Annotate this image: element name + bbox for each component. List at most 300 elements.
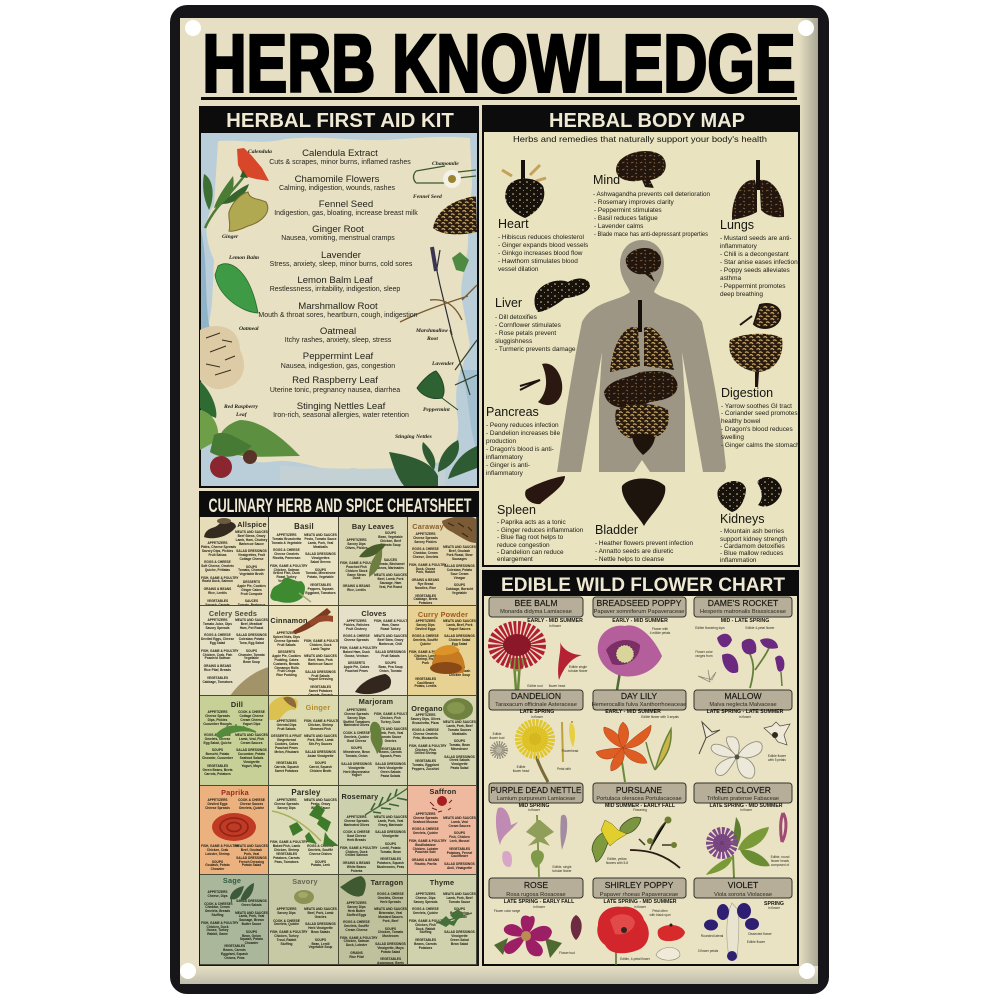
caraway text 2: Coleslaw, Potato <box>447 568 472 572</box>
bay text: Game Stews <box>347 573 366 577</box>
first aid plant labels: Lavender <box>431 361 455 367</box>
icon: marjoram sprig <box>370 722 383 754</box>
parsley text: Chicken, Shrimp <box>274 848 299 852</box>
saffron text 2: Lamb, Veal <box>451 820 468 824</box>
rosemary text 2: Mushrooms, Peas <box>377 865 404 869</box>
caraway text: Duck, Goose <box>416 567 435 571</box>
body map frame <box>483 106 799 566</box>
rosemary text: Herb Breads <box>347 838 366 842</box>
first aid plant labels: Chamomile <box>432 161 459 167</box>
first aid heading: HERBAL FIRST AID KIT <box>226 110 454 132</box>
allspice text: Savory Dips, Pickles <box>202 549 233 553</box>
liver text: Liver <box>495 296 522 310</box>
tarragon text <box>340 902 373 960</box>
flower: dame's rocket <box>694 597 792 688</box>
saffron text 2: Potatoes, Fennel <box>447 851 472 855</box>
celery text 2: Bean Soup <box>243 660 260 664</box>
first aid plant labels <box>222 149 459 440</box>
sage text: Chicken, Duck <box>207 925 228 929</box>
lungs text: - Star anise eases infection <box>720 259 798 266</box>
pancreas text: - Dandelion increases bile <box>486 430 560 437</box>
allspice text 2: Beef Stews, Gravy <box>238 534 265 538</box>
bladder text: - Heather flowers prevent infection <box>595 540 693 547</box>
spleen text: - Dandelion can reduce <box>497 549 564 556</box>
digestion text: - Yarrow soothes GI tract <box>721 403 792 410</box>
dill text: Carrots, Potatoes <box>204 772 231 776</box>
cinnamon text 2: Fruit Salads <box>311 674 330 678</box>
icon: curry powder bowls <box>430 645 465 674</box>
icon: savory pile <box>269 875 339 965</box>
flower: dandelion: LATE SPRING <box>520 709 554 715</box>
flower: violet: Edible flower <box>747 940 766 944</box>
culinary cell: ginger: Ginger <box>306 703 330 712</box>
fennel seed pile <box>433 196 477 234</box>
culinary cell: oregano: Oregano <box>411 704 443 713</box>
mind text: - Basil reduces fatigue <box>594 215 658 222</box>
culinary cell: dill <box>200 696 269 786</box>
cloves text: EGGS & CHEESE <box>343 634 370 638</box>
curry text 2: Chicken Soup <box>449 673 470 677</box>
marjoram text 2: Beans, Carrots <box>379 750 402 754</box>
first aid plant labels: Leaf <box>235 412 248 418</box>
cloves text <box>340 619 378 673</box>
marjoram text 2: Turkey, Duck <box>381 720 400 724</box>
curry text: Savory Dips <box>416 623 435 627</box>
cinnamon text 2: Yogurt Dressing <box>308 677 333 681</box>
paprika text 2: Beef, Goulash <box>241 848 262 852</box>
marjoram text: Marinated Olives <box>344 723 369 727</box>
allspice text 2: Apple Pie, Cookies <box>237 584 266 588</box>
first aid text list: Stress, anxiety, sleep, minor burns, cold sores <box>270 261 413 268</box>
flower: purslane: MID SUMMER - EARLY FALL <box>605 803 676 809</box>
kidneys text: - Cardamom detoxifies <box>720 543 785 550</box>
cloves text 2: Ham, Game <box>382 623 399 627</box>
panel: edible wild flower chart <box>483 570 798 965</box>
saffron text: Risotto, Paella <box>415 862 436 866</box>
flower: mallow: Malva neglecta Malvaceae <box>709 702 777 708</box>
cinnamon text: Cinnamon Rolls <box>274 666 299 670</box>
heart text: Heart <box>498 217 529 231</box>
tarragon text: Chicken, Salmon <box>344 939 369 943</box>
tarragon text 2: MEATS AND SAUCES <box>374 907 407 911</box>
first aid plant labels: Peppermint <box>423 407 450 413</box>
allspice text 2: SALAD DRESSINGS <box>236 549 267 553</box>
celery text: Poached Salmon <box>205 656 230 660</box>
lungs text: deep breathing <box>720 291 763 298</box>
parsley text: VEGETABLES <box>276 852 297 856</box>
culinary cell: oregano <box>408 696 477 786</box>
tarragon text: Duck, Lobster <box>346 943 367 947</box>
paprika text: Lobster, Shrimp <box>205 852 230 856</box>
caraway text 2: Vinegar <box>454 576 465 580</box>
saffron text 2: VEGETABLES <box>449 847 470 851</box>
flower: purslane: Portulaca oleracea Portulacaceae <box>596 796 682 802</box>
marjoram text 2: VEGETABLES <box>380 747 401 751</box>
saffron text 2: Cauliflower <box>451 854 468 858</box>
oregano text 2 <box>443 720 476 770</box>
allspice text: Soft Cheese, Omelets <box>201 564 234 568</box>
curry text 2: SALAD DRESSINGS <box>444 634 475 638</box>
saffron text: FISH, GAME & POULTRY <box>409 839 447 843</box>
watercolor background <box>201 133 477 486</box>
flower: dandelion: Edible <box>517 765 526 769</box>
rosemary text 2: Potatoes, Squash <box>377 861 404 865</box>
allspice text: Roast Duck, Salmon <box>202 579 233 583</box>
bay text: Chicken Stock <box>346 569 367 573</box>
flower: red clover: Trifolium pratense Fabaceae <box>707 796 779 802</box>
celery text: Egg Salad <box>210 641 225 645</box>
lungs text: inflammatory <box>720 243 758 250</box>
body map subtitle: Herbs and remedies that naturally support your body's health <box>513 134 767 144</box>
celery text 2: Coleslaw, Potato <box>239 637 264 641</box>
flower: breadseed poppy: Flower with <box>652 627 668 631</box>
sage text 2 <box>235 900 268 946</box>
culinary cell: thyme: Thyme <box>430 878 454 887</box>
digestion text <box>721 386 800 449</box>
basil text 2: Peppers, Squash <box>308 587 333 591</box>
first aid text list: Stinging Nettles Leaf <box>297 401 386 412</box>
flower: shirley poppy: LATE SPRING - MID SUMMER <box>603 899 677 905</box>
rosemary text 2: SALAD DRESSINGS <box>375 830 406 834</box>
flower: day lily: EARLY - MID SUMMER <box>605 709 661 715</box>
basil text 2: Tomato, Minestrone <box>305 571 336 575</box>
savory text 2 <box>304 908 337 950</box>
curry text: FISH, GAME & POULTRY <box>409 650 447 654</box>
oregano text: FISH, GAME & POULTRY <box>409 744 447 748</box>
pancreas text: inflammatory <box>486 470 524 477</box>
celery text 2: Tuna, Egg Salad <box>239 641 264 645</box>
caraway text 2: SALAD DRESSINGS <box>444 564 475 568</box>
thyme text 2: Tomato Sauce <box>449 900 470 904</box>
tarragon text: GRAINS <box>350 951 363 955</box>
sage text 2: Chowder <box>245 941 258 945</box>
parsley text: Peas, Tomatoes <box>274 860 299 864</box>
ginger root <box>229 192 268 231</box>
flower: breadseed poppy <box>593 597 686 690</box>
caraway text <box>409 532 447 605</box>
cinnamon text 2: Lamb Tagine <box>311 647 330 651</box>
flower: dame's rocket: Edible flowering tops <box>695 626 725 630</box>
chamomile sprig <box>414 166 476 188</box>
celery text 2: MEATS AND SAUCES <box>235 618 268 622</box>
flower: shirley poppy: with black spot <box>650 913 671 917</box>
flower: purple dead nettle: PURPLE DEAD NETTLE <box>490 785 582 795</box>
kidneys text: - Blue mallow reduces <box>720 550 783 557</box>
cinnamon text: Cheese Spreads <box>274 639 299 643</box>
caraway text 2: Vegetable <box>452 591 467 595</box>
cinnamon text: Apple Pie, Cookies <box>272 654 301 658</box>
cinnamon text: Spiced Nuts, Dips <box>273 635 300 639</box>
curry text: VEGETABLES <box>415 677 436 681</box>
allspice text: Quiche, Frittatas <box>205 568 230 572</box>
dill text: SOUPS <box>212 748 223 752</box>
first aid plant labels: Calendula <box>248 149 272 155</box>
flower: bee balm: tubular flower <box>568 669 589 673</box>
icon: basil leaves <box>270 578 312 603</box>
sage text 2: Bean, Onion <box>242 934 261 938</box>
dill text: VEGETABLES <box>207 764 228 768</box>
allspice text 2: Vinaigrettes, Fruit <box>238 553 265 557</box>
flower: red clover: composed of <box>771 863 789 867</box>
marjoram text: Vinaigrette <box>348 766 365 770</box>
oregano text 2: Minestrone <box>451 747 468 751</box>
sage text: COOK & CHEESE <box>204 902 231 906</box>
bay text: Rice, Lentils <box>347 588 366 592</box>
body map heading: HERBAL BODY MAP <box>549 110 745 132</box>
paprika text 2: French Dressing <box>239 860 264 864</box>
ginger text 2: Stir-Fry Sauces <box>309 742 332 746</box>
rosemary text <box>340 816 373 874</box>
icon: liver <box>534 279 590 312</box>
flower: mallow: in flower <box>739 715 752 719</box>
icon: sage leaves <box>200 875 269 965</box>
flower: rose: Rosa rugosa Rosaceae <box>506 892 566 898</box>
rosemary text 2: VEGETABLES <box>380 857 401 861</box>
mind text: - Rosemary improves clarity <box>594 199 675 206</box>
flower: dandelion: Flowerhead <box>562 749 579 753</box>
culinary cell: marjoram <box>339 696 408 786</box>
thyme text 2: Lamb, Pork, Beef <box>446 896 473 900</box>
first aid text list: Calming, indigestion, wounds, rashes <box>279 185 395 192</box>
allspice text 2: SAUCES <box>245 599 258 603</box>
first aid plant labels: Red Raspberry <box>223 404 259 410</box>
sage text: Omelets, Breads <box>205 909 230 913</box>
marjoram text 2: Tomato Sauce <box>380 735 401 739</box>
tarragon text: APPETIZERS <box>346 901 366 905</box>
savory text 2: Beef, Pork, Lamb <box>307 911 334 915</box>
liver text: - Dill detoxifies <box>495 314 537 321</box>
bay text: Duck <box>353 576 360 580</box>
allspice text 2: SOUPS <box>246 565 257 569</box>
rosemary text: APPETIZERS <box>346 815 366 819</box>
culinary cell: savory: Savory <box>292 877 318 886</box>
rosemary text: White Beans <box>347 865 366 869</box>
flower: purple dead nettle: MID SPRING <box>519 803 549 809</box>
marjoram text: Herb Mayonnaise <box>343 770 370 774</box>
oregano text: Feta, Mozzarella <box>413 736 438 740</box>
sage text: APPETIZERS <box>207 890 228 894</box>
savory text: Omelets, Quiche <box>274 922 299 926</box>
flower: dandelion <box>489 690 583 782</box>
marjoram text: SOUPS <box>351 746 362 750</box>
marjoram text: Cheese Spreads <box>344 712 369 716</box>
pancreas text: Pancreas <box>486 405 539 419</box>
bay text 2 <box>374 531 407 589</box>
tarragon text 2: Vinaigrette, Mayo <box>377 946 404 950</box>
cloves text 2: Fruit Salads <box>381 654 400 658</box>
flower: shirley poppy: Petal often <box>652 909 668 913</box>
first aid text list: Nausea, indigestion, gas, congestion <box>281 363 395 370</box>
icon: paprika spiral <box>212 813 256 841</box>
flower: dame's rocket: Flower color <box>695 650 714 654</box>
heart text: - Hibiscus reduces cholesterol <box>498 234 584 241</box>
dill text 2: MEATS AND SAUCES <box>235 733 268 737</box>
basil text 2: Pesto, Tomato Sauce <box>304 537 336 541</box>
basil text: APPETIZERS <box>276 533 296 537</box>
parsley text <box>270 798 308 864</box>
curry text: APPETIZERS <box>415 619 436 623</box>
mind text: - Blade mace has anti-depressant properties <box>594 231 708 238</box>
flower: bee balm: Edible root <box>527 684 543 688</box>
parsley text: FISH, GAME & POULTRY <box>270 840 308 844</box>
basil text 2: VEGETABLES <box>310 583 331 587</box>
dill text 2 <box>235 710 268 768</box>
caraway text: Pork, Rabbit <box>416 570 435 574</box>
culinary cell: tarragon <box>339 875 408 965</box>
ginger text 2: Chicken Broth <box>310 769 331 773</box>
cloves text: Poached Pears <box>345 669 368 673</box>
bladder text: - Annatto seeds are diuretic <box>595 548 674 555</box>
tarragon text 2: VEGETABLES <box>380 957 401 961</box>
culinary cell: saffron: Saffron <box>430 787 456 796</box>
rosemary text: Marinated Olives <box>344 823 369 827</box>
icon: spleen <box>525 476 565 504</box>
rosemary text 2: Lentil, Potato <box>380 846 401 850</box>
marjoram text 2: Herb Vinaigrette <box>378 766 403 770</box>
celery text <box>201 618 239 684</box>
parsley text: Savory Dips <box>277 806 296 810</box>
flower: purple dead nettle: Lamium purpureum Lamiaceae <box>497 796 575 802</box>
sage vegetables text: VEGETABLES <box>224 944 245 948</box>
icon: cloves pile <box>355 674 392 694</box>
flower: dame's rocket: MID - LATE SPRING <box>721 618 769 624</box>
flower: purple dead nettle: in flower <box>528 808 541 812</box>
caraway text: Cabbage, Beets <box>414 597 437 601</box>
cinnamon text: Fruit Salads <box>277 643 296 647</box>
culinary cell: paprika: Paprika <box>221 788 249 797</box>
oregano text: Bruschetta, Pizza <box>412 721 439 725</box>
peppermint leaf <box>417 371 458 410</box>
basil text 2: SALAD DRESSINGS <box>305 552 336 556</box>
parsley text 2: Omelets, Soufflé <box>308 848 333 852</box>
lungs text: - Poppy seeds alleviates <box>720 267 790 274</box>
parsley text: Cheese Spreads <box>274 802 299 806</box>
cinnamon text: Custards, Breads <box>273 662 300 666</box>
sage text: Goose, Turkey <box>207 928 228 932</box>
flower: red clover <box>694 783 792 878</box>
flower: purple dead nettle <box>489 783 583 877</box>
marjoram text: Omelets, Quiche <box>344 735 369 739</box>
marjoram text: Yogurt <box>351 773 362 777</box>
flower: red clover: Edible, round <box>771 855 790 859</box>
mounting holes <box>180 20 815 979</box>
thyme text: VEGETABLES <box>415 938 436 942</box>
flower: mallow <box>694 690 792 778</box>
first aid text list <box>258 148 418 419</box>
flower: violet: VIOLET <box>728 880 759 890</box>
first aid text list: Mouth & throat sores, heartburn, cough, indigestion <box>258 312 418 319</box>
bay text 2: SOUPS <box>385 531 396 535</box>
ginger text: Fruit Salads <box>277 727 296 731</box>
basil text <box>270 533 308 583</box>
bay text: Olives, Pickles <box>345 546 368 550</box>
bladder text: - Nettle helps to cleanse <box>595 556 664 563</box>
liver text: - Turmeric prevents damage <box>495 346 576 353</box>
tarragon text 2: Chicken, Tomato <box>378 930 403 934</box>
parsley text 2: EGGS & CHEESE <box>307 844 334 848</box>
parsley text 2: Cheese Dishes <box>309 852 332 856</box>
savory text <box>270 908 303 946</box>
marjoram text: Savory Dips <box>347 716 366 720</box>
allspice text: EGGS & CHEESE <box>204 560 231 564</box>
mind text: - Lavender calms <box>594 223 643 230</box>
dill text 2: Yogurt Dips <box>243 722 260 726</box>
basil text 2: Lamb, Pork, Veal <box>308 541 333 545</box>
parsley text 2 <box>304 799 337 868</box>
allspice text 2: Ginger Cakes <box>241 588 262 592</box>
caraway text: Savory Pickles <box>414 540 437 544</box>
flower: breadseed poppy: Papaver somniferum Papaveraceae <box>594 609 684 615</box>
culinary cell: marjoram: Marjoram <box>359 697 393 706</box>
culinary cell: thyme <box>408 875 477 965</box>
first aid text list: Restlessness, irritability, indigestion, sleep <box>270 286 400 293</box>
bay text 2: Tomato Soup <box>380 543 401 547</box>
culinary cell: tarragon: Tarragon <box>371 878 403 887</box>
pancreas text: - Dragon's blood is anti- <box>486 446 554 453</box>
flower: violet: Viola sororia Violaceae <box>714 892 772 898</box>
icon: tarragon bunch <box>339 875 408 965</box>
allspice text: Pâtés, Cheese Spreads <box>201 545 236 549</box>
dill text 2: Seafood Salads <box>240 756 263 760</box>
ginger text: Gingerbread <box>277 738 296 742</box>
caraway text 2 <box>443 545 476 595</box>
flower: dandelion: flower bud <box>490 736 505 740</box>
paprika text: Chicken, Crab <box>207 848 228 852</box>
basil text: Vegetables <box>278 579 295 583</box>
ginger text 2: Steamed Fish <box>310 727 331 731</box>
pancreas text: inflammatory <box>486 454 524 461</box>
thyme text: Duck, Rabbit <box>416 927 435 931</box>
lavender and roots <box>400 247 477 395</box>
cloves text 2: Barbecue, Chili <box>379 642 402 646</box>
saffron text: EGGS & CHEESE <box>412 827 439 831</box>
flower: shirley poppy: in flower <box>634 905 647 909</box>
dill text: Chowder, Cucumber <box>202 756 233 760</box>
savory text: Stuffing <box>280 942 293 946</box>
flower: mallow: Edible flower <box>768 754 787 758</box>
oregano text 2: Greek Salads <box>449 758 470 762</box>
cloves text: Cheese Spreads <box>344 638 369 642</box>
culinary cell: cinnamon <box>269 606 339 696</box>
sage text 2: Sausage, Brown <box>239 918 264 922</box>
saffron text: APPETIZERS <box>415 812 436 816</box>
culinary cell: rosemary: Rosemary <box>342 792 378 801</box>
cloves text: APPETIZERS <box>346 619 366 623</box>
curry text: Chicken, Lamb <box>414 654 437 658</box>
lemon balm leaf <box>215 264 258 313</box>
flower chart heading: EDIBLE WILD FLOWER CHART <box>501 574 785 596</box>
marjoram text: SALAD DRESSINGS <box>341 762 372 766</box>
caraway text: VEGETABLES <box>415 594 436 598</box>
first aid text list: Lavender <box>321 250 362 261</box>
culinary cell: ginger <box>269 696 339 786</box>
cloves text 2: MEATS AND SAUCES <box>374 634 407 638</box>
basil text: Roast Turkey <box>277 575 296 579</box>
first aid text list: Uterine tonic, pregnancy nausea, diarrhea <box>270 387 400 394</box>
savory text: Chicken, Turkey <box>274 934 299 938</box>
allspice text 2 <box>235 530 268 606</box>
first aid text list: Itchy rashes, anxiety, sleep, stress <box>285 337 392 344</box>
ginger text 2: Chicken, Shrimp <box>308 723 333 727</box>
thyme text 2: SALAD DRESSINGS <box>444 930 475 934</box>
dill text 2: Lamb, Veal, Fish <box>239 737 264 741</box>
flower: violet <box>694 878 792 961</box>
culinary cell: cinnamon: Cinnamon <box>270 616 308 625</box>
cloves text 2: Bean, Pea Soup <box>378 665 403 669</box>
culinary cell: basil <box>269 517 339 606</box>
parsley text: Baked Fish, Lamb <box>273 844 300 848</box>
first aid plant labels: Ginger <box>222 234 239 240</box>
